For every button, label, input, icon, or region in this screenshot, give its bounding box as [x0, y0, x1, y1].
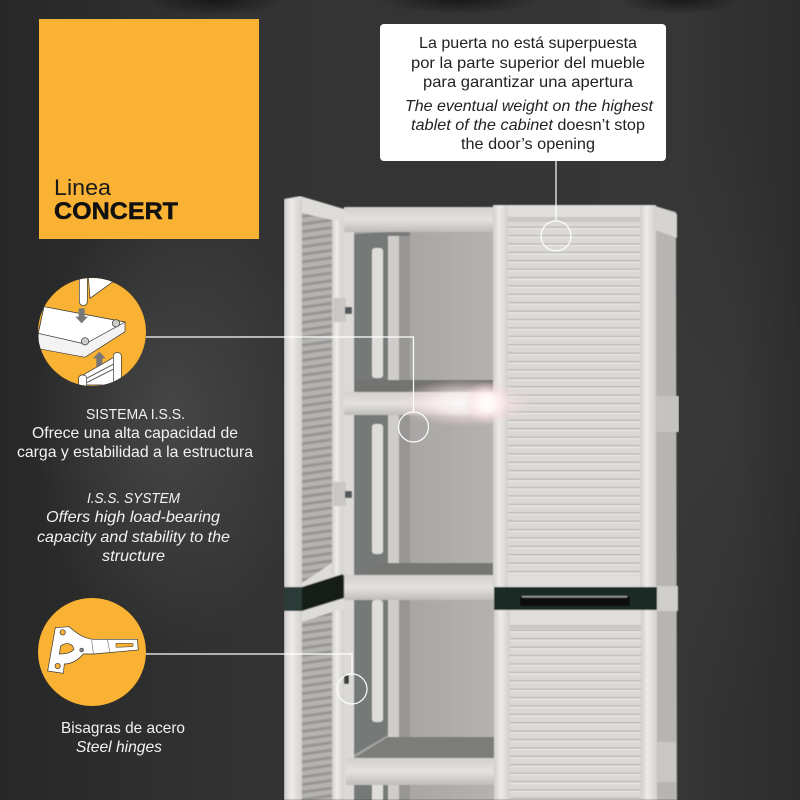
right door upper — [493, 205, 656, 587]
icon: I.S.S. shelf assembly — [38, 277, 146, 388]
text: hinges: Bisagras de acero — [61, 720, 185, 737]
text: I.S.S. english: I.S.S. SYSTEM — [87, 490, 180, 507]
shelf 2 — [344, 563, 494, 600]
text: I.S.S. spanish: SISTEMA I.S.S. — [86, 406, 185, 423]
leader line: hinge — [146, 654, 367, 704]
left door lower — [284, 598, 344, 800]
top rail — [344, 207, 494, 232]
hinges — [333, 298, 352, 684]
right door lower — [494, 610, 657, 800]
spanish text: La puerta no está superpuesta — [419, 35, 637, 52]
brand name light: Linea — [54, 175, 111, 200]
english text: the door’s opening — [461, 136, 595, 153]
shelf 3 — [346, 737, 494, 785]
text: hinges — [61, 720, 185, 756]
shelf 1 — [344, 380, 494, 415]
text: I.S.S. spanish — [17, 406, 253, 461]
english text: tablet of the cabinet doesn’t stop — [411, 117, 645, 134]
brand panel — [39, 19, 259, 239]
right door dark band — [494, 587, 657, 610]
text: I.S.S. english: capacity and stability to the — [37, 529, 230, 546]
right side panel — [655, 206, 679, 800]
lens flare — [395, 379, 535, 427]
cabinet interior — [344, 207, 494, 800]
text: I.S.S. spanish: carga y estabilidad a la estructura — [17, 444, 253, 461]
text: I.S.S. english: structure — [102, 548, 165, 565]
callout: door opening — [380, 24, 666, 161]
spanish text: por la parte superior del mueble — [411, 55, 645, 72]
icon: steel hinge — [38, 598, 146, 706]
leader line: I.S.S. — [146, 337, 428, 442]
leader line: door callout — [541, 161, 571, 251]
brand name bold: CONCERT — [54, 198, 178, 225]
english text — [405, 98, 654, 153]
spanish text — [411, 35, 645, 91]
text: I.S.S. english: Offers high load-bearing — [46, 509, 220, 526]
left door upper — [284, 196, 344, 589]
cabinet photo — [284, 196, 679, 800]
english text: The eventual weight on the highest — [405, 98, 654, 115]
text: hinges: Steel hinges — [76, 739, 162, 756]
text: I.S.S. spanish: Ofrece una alta capacidad de — [32, 425, 238, 442]
text: I.S.S. english — [37, 490, 230, 565]
spanish text: para garantizar una apertura — [423, 74, 633, 91]
left door dark band — [284, 574, 343, 611]
